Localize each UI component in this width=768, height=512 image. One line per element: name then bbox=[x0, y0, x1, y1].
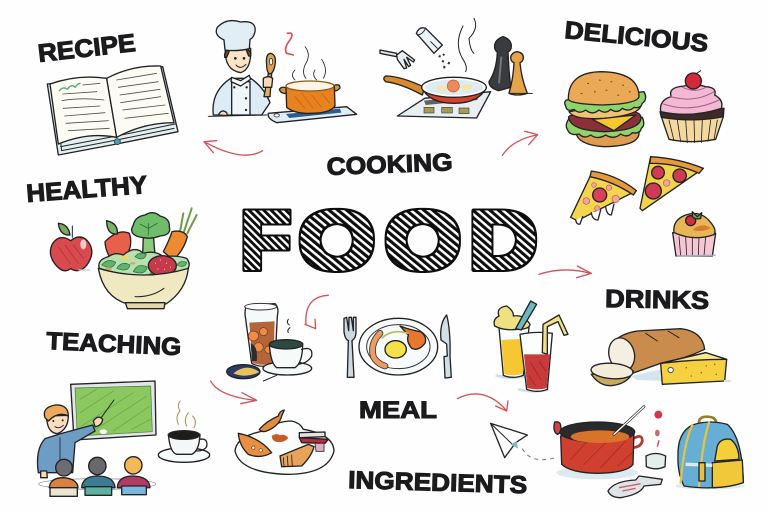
icon: pepper mill bbox=[489, 37, 511, 91]
icon: blue backpack bbox=[675, 417, 745, 489]
icon: red soup pot bbox=[554, 407, 644, 479]
icon: teacher pointing bbox=[37, 405, 103, 478]
icon: breakfast plate bbox=[359, 318, 438, 375]
title: FOOD: O bbox=[385, 195, 461, 285]
icon: cutting board bbox=[608, 476, 662, 498]
icon: broccoli bbox=[132, 213, 170, 255]
icon: coffee cup with saucer bbox=[158, 401, 210, 462]
healthy apple and salad bowl artwork bbox=[50, 208, 197, 309]
icon: salt mill bbox=[509, 52, 532, 95]
label: DRINKS: DRINKS bbox=[605, 285, 709, 315]
label: RECIPE: RECIPE bbox=[37, 29, 137, 68]
icon: students at table bbox=[39, 457, 156, 496]
icon: cupcake with cherry bbox=[660, 71, 724, 143]
label: TEACHING: TEACHING bbox=[46, 328, 182, 361]
icon: coffee cup and dish bbox=[227, 319, 312, 381]
label: HEALTHY: HEALTHY bbox=[25, 171, 148, 208]
arrow: food to drink bbox=[305, 295, 328, 329]
icon: juice glass with fruit bbox=[494, 301, 537, 378]
icon: paper plane with dashed trail bbox=[491, 423, 556, 460]
icon: red drink with straw bbox=[518, 315, 568, 391]
bowl of salad greens bbox=[98, 250, 189, 309]
icon: apple bbox=[50, 223, 92, 271]
steam lines bbox=[458, 18, 476, 72]
bottom right quadrant artwork bbox=[457, 266, 745, 498]
breakfast place setting artwork bbox=[344, 315, 451, 378]
arrow: cooking to delicious bbox=[502, 131, 538, 155]
icon: iced drink glass bbox=[245, 303, 278, 366]
label: DELICIOUS: DELICIOUS bbox=[563, 17, 709, 58]
icon: spice drops and small tub bbox=[646, 411, 666, 469]
icon: loaf of bread and slice bbox=[591, 329, 705, 386]
top right quadrant artwork bbox=[380, 18, 724, 256]
label: INGREDIENTS: INGREDIENTS bbox=[348, 467, 528, 499]
icon: burger bbox=[565, 72, 646, 147]
title: FOOD: O bbox=[299, 195, 375, 285]
title: FOOD: D bbox=[470, 196, 537, 286]
arrow: food to drinks bbox=[539, 266, 591, 278]
icon: salt shaker and grains bbox=[416, 28, 450, 68]
title: FOOD: F bbox=[241, 196, 290, 286]
icon: green chalkboard bbox=[71, 381, 156, 440]
icon: red pepper bbox=[105, 221, 131, 261]
icon: open recipe book bbox=[47, 66, 178, 155]
icon: fork bbox=[380, 50, 415, 69]
icon: frying pan on burner bbox=[384, 76, 491, 118]
icon: pizza slice left bbox=[571, 171, 636, 224]
icon: small cupcake bbox=[673, 212, 716, 256]
top left quadrant artwork bbox=[47, 21, 357, 155]
arrow: cooking to recipe bbox=[204, 141, 263, 155]
icon: pizza slice right bbox=[640, 157, 703, 211]
label: MEAL: MEAL bbox=[359, 397, 437, 424]
icon: dinner fork bbox=[344, 317, 356, 377]
arrow: meal to ingredients bbox=[457, 394, 508, 411]
icon: plate with fish and sides bbox=[235, 410, 334, 474]
bottom left quadrant artwork bbox=[37, 295, 334, 496]
icon: wedge of cheese bbox=[661, 353, 731, 384]
icon: carrot bbox=[163, 208, 197, 260]
icon: chef with wooden spoon bbox=[208, 21, 275, 116]
label: COOKING: COOKING bbox=[326, 149, 453, 181]
icon: cooking pot on stove bbox=[268, 33, 357, 123]
arrow: teaching to meal bbox=[211, 381, 257, 404]
title: FOOD bbox=[241, 195, 537, 286]
icon: table knife bbox=[441, 315, 451, 378]
